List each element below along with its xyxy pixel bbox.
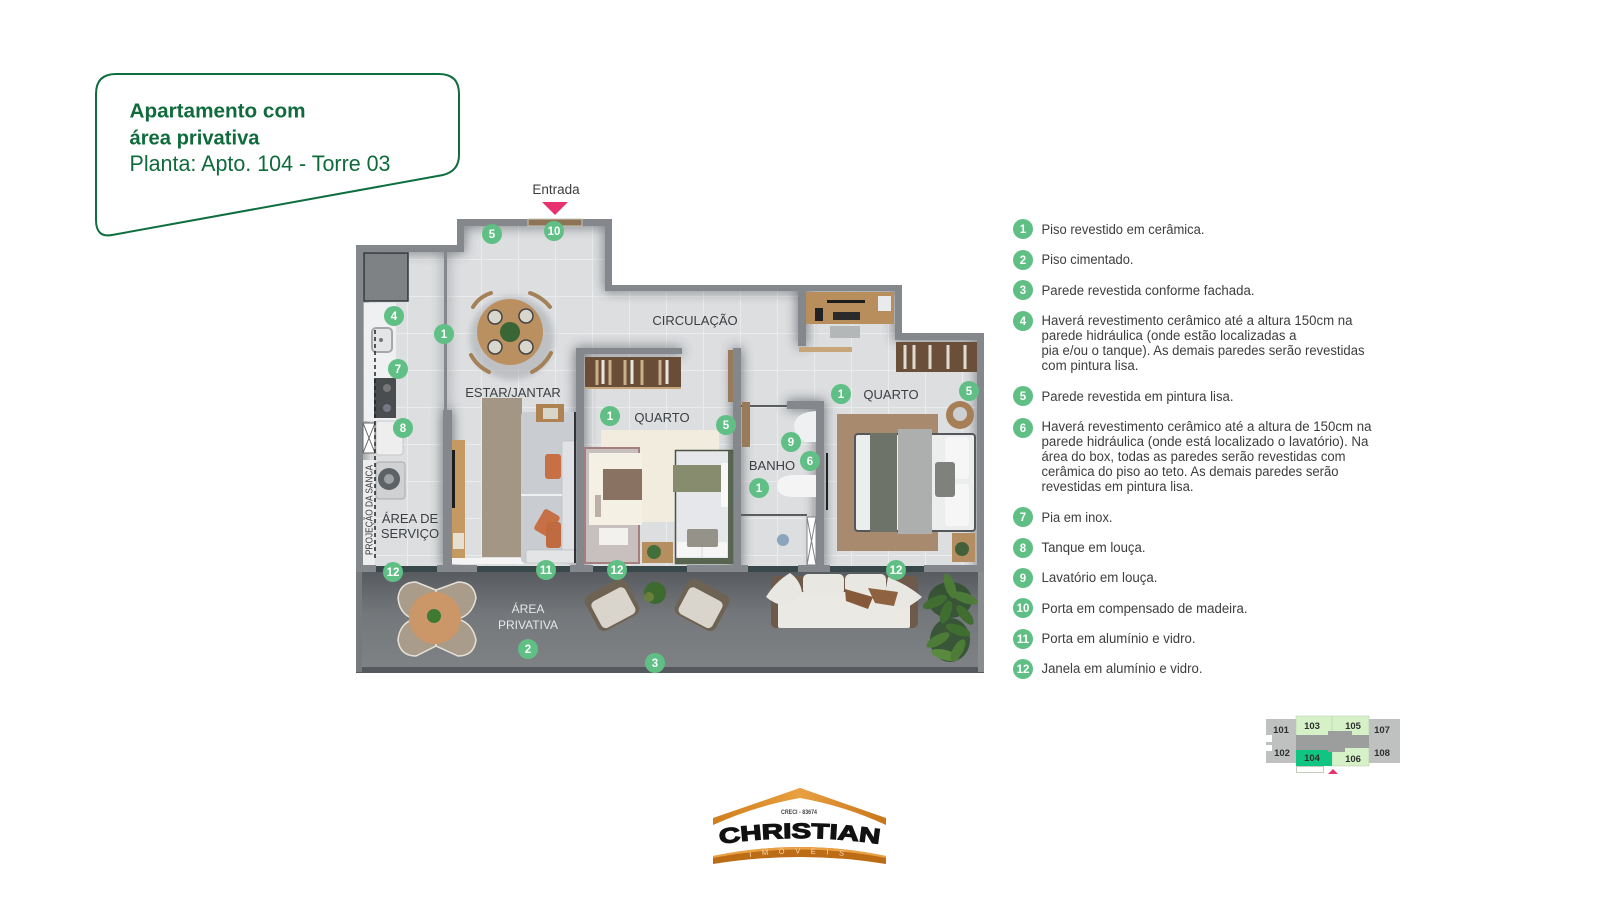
logo — [713, 788, 886, 864]
legend text: Haverá revestimento cerâmico até a altura de 150cm na — [1042, 419, 1372, 434]
key plan: 103 — [1304, 721, 1320, 732]
room labels: ESTAR/JANTAR — [465, 385, 561, 400]
sub brand: IMÓVEIS — [750, 848, 844, 857]
key plan: 102 — [1274, 748, 1290, 759]
legend marker numbers: 2 — [1020, 255, 1026, 267]
key plan: 105 — [1345, 721, 1362, 732]
home office and wardrobe — [799, 292, 977, 372]
legend text: Haverá revestimento cerâmico até a altura 150cm na — [1042, 313, 1353, 328]
room labels — [381, 313, 919, 632]
desk chair — [830, 326, 860, 338]
legend marker numbers: 1 — [1020, 224, 1027, 236]
living room furniture — [452, 398, 576, 564]
sofa — [766, 573, 922, 628]
plan markers: 6 — [807, 456, 813, 468]
icon: entrance arrow — [542, 202, 568, 215]
plan markers: 7 — [395, 364, 401, 376]
balcony floor — [356, 568, 984, 673]
dining table — [470, 293, 554, 380]
orange band — [713, 847, 886, 864]
side table — [536, 404, 564, 422]
wordmark: CHRISTIAN — [719, 822, 880, 844]
legend text: parede hidráulica (onde está localizado o lavatório). Na — [1042, 434, 1369, 449]
room labels: QUARTO — [634, 410, 690, 425]
tv rack — [452, 440, 465, 558]
bedroom one furniture — [585, 350, 750, 564]
soffit label: PROJEÇÃO DA SANCA — [362, 465, 376, 555]
wall ambient shadow — [356, 219, 984, 572]
drain — [777, 534, 789, 546]
plan markers: 10 — [548, 226, 560, 238]
plan markers: 9 — [788, 437, 794, 449]
tank — [376, 421, 403, 455]
corner planter — [952, 533, 975, 562]
title text: Apartamento com — [130, 100, 306, 122]
room labels: PRIVATIVA — [498, 618, 558, 632]
entrance marker: Entrada — [532, 182, 580, 197]
legend text: Piso revestido em cerâmica. — [1042, 222, 1204, 237]
shelf board — [799, 347, 852, 352]
rug — [837, 414, 938, 551]
legend text: parede hidráulica (onde estão localizadas a — [1042, 328, 1297, 343]
entrance marker — [532, 182, 580, 215]
plan markers: 12 — [387, 567, 399, 579]
legend marker numbers: 3 — [1020, 285, 1026, 297]
plan markers: 1 — [756, 483, 763, 495]
key plan: 106 — [1345, 754, 1361, 765]
room labels: ÁREA DE — [382, 511, 439, 526]
title text — [130, 100, 390, 176]
legend marker numbers: 6 — [1020, 423, 1026, 435]
plan markers: 4 — [391, 311, 398, 323]
key plan: 101 — [1273, 725, 1290, 736]
plan markers: 1 — [441, 329, 448, 341]
stove — [374, 378, 396, 418]
legend text: cerâmica do piso ao teto. As demais paredes serão — [1042, 464, 1338, 479]
legend marker numbers: 11 — [1017, 634, 1030, 646]
wardrobe — [896, 342, 977, 372]
large plants — [921, 572, 979, 663]
roof — [713, 788, 886, 825]
soffit strip — [363, 460, 375, 565]
legend marker numbers: 7 — [1020, 512, 1026, 524]
legend text: com pintura lisa. — [1042, 358, 1138, 373]
plan markers: 5 — [723, 420, 730, 432]
plan markers: 2 — [525, 644, 531, 656]
floor plan — [356, 219, 984, 673]
bed right — [676, 450, 732, 564]
toilet — [777, 475, 816, 497]
sill — [452, 558, 524, 564]
legend text — [1042, 222, 1372, 676]
legend marker numbers: 10 — [1017, 603, 1029, 615]
legend text: Piso cimentado. — [1042, 252, 1134, 267]
counter — [364, 303, 396, 421]
sofa cushions — [545, 454, 561, 479]
legend markers — [1013, 219, 1033, 679]
key plan: 104 — [1304, 753, 1321, 764]
plan markers: 5 — [966, 386, 973, 398]
plan markers: 11 — [540, 565, 553, 577]
cream rug — [601, 430, 719, 522]
shelf — [585, 357, 681, 388]
legend text: Lavatório em louça. — [1042, 570, 1158, 585]
armchair left — [582, 577, 642, 633]
legend marker numbers: 4 — [1020, 316, 1027, 328]
walls — [356, 219, 984, 572]
legend text: Tanque em louça. — [1042, 540, 1146, 555]
legend text: Janela em alumínio e vidro. — [1042, 661, 1202, 676]
plan markers — [383, 221, 979, 673]
round side table — [946, 401, 974, 429]
plan markers: 5 — [489, 229, 496, 241]
legend — [1013, 219, 1372, 679]
plan markers: 1 — [838, 389, 845, 401]
plan markers: 12 — [890, 565, 902, 577]
room labels: ÁREA — [512, 601, 544, 616]
legend marker numbers: 12 — [1017, 664, 1029, 676]
pillows — [945, 437, 969, 479]
kitchen and laundry fixtures — [362, 253, 408, 565]
bathroom fixtures — [777, 411, 816, 565]
title callout — [96, 74, 459, 235]
room labels: BANHO — [749, 458, 795, 473]
legend marker numbers: 8 — [1020, 543, 1027, 555]
title text: Planta: Apto. 104 - Torre 03 — [130, 151, 390, 176]
key plan: 108 — [1374, 748, 1390, 759]
legend text: área do box, todas as paredes serão revestidas com — [1042, 449, 1346, 464]
plan markers: 1 — [607, 411, 614, 423]
plan markers: 3 — [652, 658, 658, 670]
licence number: CRECI - 83674 — [781, 810, 818, 816]
title text: área privativa — [130, 128, 260, 150]
callout outline — [96, 74, 459, 235]
bed left — [585, 448, 639, 563]
legend marker numbers: 9 — [1020, 573, 1026, 585]
armchair right — [672, 577, 732, 633]
balcony furniture — [398, 572, 979, 663]
legend text: pia e/ou o tanque). As demais paredes serão revestidas — [1042, 343, 1365, 358]
plan markers: 8 — [400, 423, 407, 435]
outdoor dining set — [398, 582, 476, 656]
floor slab — [356, 219, 984, 673]
legend text: revestidas em pintura lisa. — [1042, 479, 1194, 494]
plan markers: 12 — [611, 565, 623, 577]
nightstand — [642, 542, 673, 563]
entrance door — [528, 219, 582, 226]
bed base — [855, 434, 975, 531]
main bedroom furniture — [837, 401, 975, 562]
sink — [372, 328, 392, 352]
thin door lines — [741, 405, 828, 516]
basin — [794, 411, 816, 442]
washer — [376, 462, 405, 499]
fridge — [364, 253, 408, 301]
room labels: SERVIÇO — [381, 526, 439, 541]
legend marker numbers — [1017, 224, 1030, 676]
room labels: CIRCULAÇÃO — [652, 313, 738, 328]
key plan — [1266, 716, 1400, 774]
dashed soffit line — [374, 330, 376, 560]
wall panels — [728, 350, 733, 402]
shaft — [363, 423, 375, 453]
rug — [482, 398, 522, 557]
window dark lines — [376, 566, 976, 572]
legend text: Pia em inox. — [1042, 510, 1112, 525]
sofa — [521, 412, 576, 563]
key plan: 107 — [1374, 725, 1390, 736]
legend text: Parede revestida em pintura lisa. — [1042, 389, 1234, 404]
shaft — [807, 517, 816, 565]
blankets — [870, 433, 897, 532]
potted plant — [644, 582, 666, 604]
desk — [806, 292, 894, 324]
legend text: Porta em alumínio e vidro. — [1042, 631, 1196, 646]
legend text: Parede revestida conforme fachada. — [1042, 283, 1254, 298]
room labels: QUARTO — [863, 387, 919, 402]
legend text: Porta em compensado de madeira. — [1042, 601, 1248, 616]
legend marker numbers: 5 — [1020, 391, 1027, 403]
